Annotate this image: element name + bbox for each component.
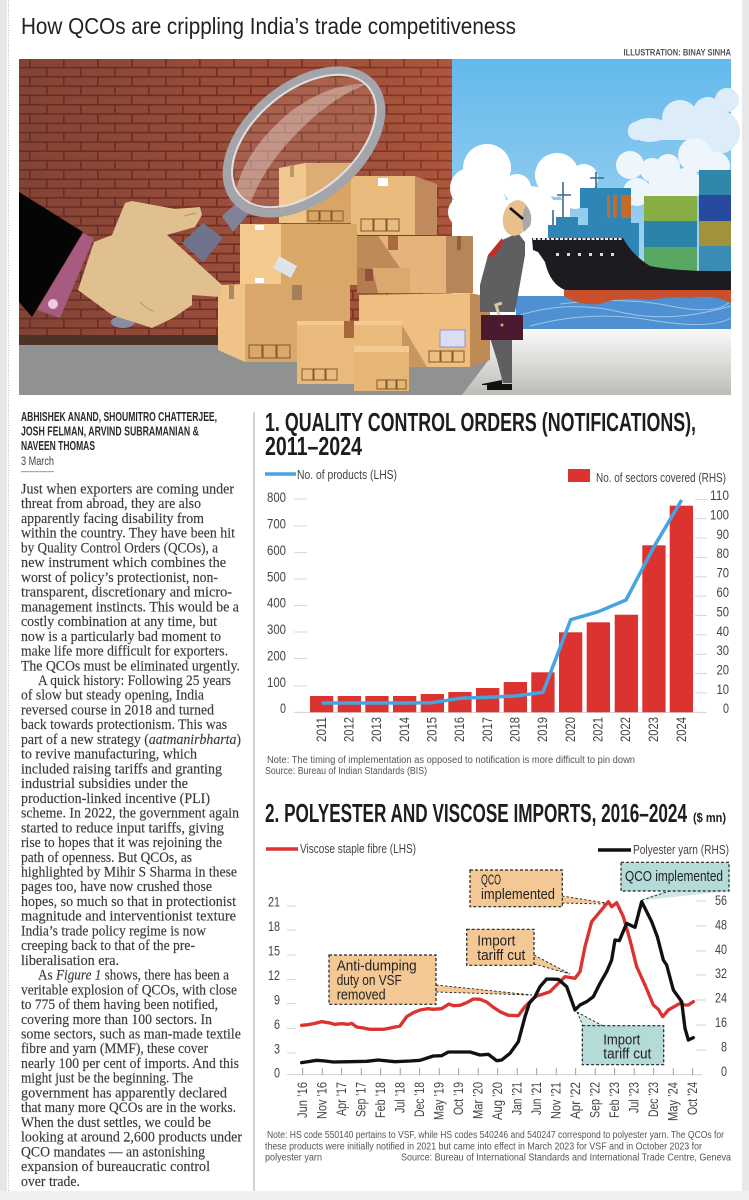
month labels: Nov ’16 (314, 1082, 330, 1119)
article body text: When the dust settles, we could be (21, 1115, 211, 1131)
article body text: hopes, so much so that in protectionist (21, 894, 237, 910)
left page margin strip (0, 0, 7, 1192)
article body text: highlighted by Mihir S Sharma in these (21, 864, 237, 880)
man with briefcase (480, 198, 532, 390)
right page margin strip (742, 0, 749, 1192)
bottom-left big box (218, 284, 350, 362)
article body text: included raising tariffs and granting (21, 761, 222, 777)
left axis labels: 700 (267, 516, 286, 532)
left axis labels: 12 (268, 968, 280, 983)
chart 2 legend: polyester (598, 842, 729, 857)
year labels: 2011 (314, 717, 329, 742)
small front box (297, 321, 402, 384)
article body text (21, 482, 242, 1190)
callout: anti-dumping duty removed: removed (337, 987, 386, 1004)
article body text: As Figure 1 shows, there has been a (38, 968, 229, 984)
month labels: Sep ’17 (352, 1082, 368, 1117)
right axis labels: 16 (715, 1015, 727, 1030)
year labels: 2014 (397, 717, 412, 742)
year labels: 2019 (535, 717, 550, 742)
month labels: Feb ’23 (606, 1082, 622, 1118)
article body text: reversed course in 2018 and turned (21, 702, 214, 718)
red line: viscose staple fibre (302, 902, 693, 1029)
top-left box (279, 163, 351, 223)
right axis labels: 50 (716, 604, 729, 619)
article body text: worst of policy’s protectionist, non- (21, 570, 218, 586)
left axis labels: 100 (267, 675, 286, 690)
callout: import tariff cut (viscose) (467, 929, 570, 974)
black line: polyester yarn (302, 902, 693, 1063)
right axis labels: 56 (715, 893, 727, 908)
article body text: transparent, discretionary and micro- (21, 585, 232, 601)
callout: QCO implemented (polyester) (621, 862, 729, 900)
chart 2 heading: ($ mn) (693, 810, 726, 825)
chart 1: bars and line (267, 488, 729, 742)
left axis labels: 300 (267, 622, 286, 637)
left axis labels: 15 (268, 944, 280, 958)
article body text: make life more difficult for exporters. (21, 644, 228, 660)
callout: anti-dumping duty removed (329, 955, 532, 1004)
month labels: Jan ’21 (508, 1082, 524, 1115)
left axis labels: 18 (268, 919, 280, 934)
date: 3 March (21, 456, 54, 468)
article body text: by Quality Control Orders (QCOs), a (21, 540, 218, 556)
right axis labels: 70 (716, 566, 729, 581)
month labels: Aug ’20 (489, 1082, 505, 1120)
callout: import tariff cut (viscose): Import (477, 932, 516, 949)
handling icons (249, 211, 464, 389)
right axis labels: 24 (715, 991, 727, 1006)
year labels: 2013 (369, 717, 384, 742)
right axis labels: 32 (715, 966, 727, 981)
right axis labels: 10 (716, 682, 729, 697)
chart 1 legend: sectors (568, 469, 726, 485)
year labels: 2021 (590, 717, 606, 742)
floor (19, 345, 490, 395)
chart 2: import lines and callouts (268, 862, 729, 1121)
right axis labels (710, 488, 729, 716)
article body text: rise to hopes that it was rejoining the (21, 835, 222, 851)
right axis labels: 0 (723, 701, 729, 716)
right axis labels: 40 (716, 624, 729, 639)
month labels: Jul ’18 (392, 1082, 408, 1113)
article body text: Just when exporters are coming under (21, 482, 234, 498)
left axis labels: 0 (280, 701, 286, 716)
middle-left box (240, 224, 357, 285)
right axis labels: 40 (715, 942, 727, 957)
left axis labels: 200 (267, 648, 286, 664)
chart 2 note and source: polyester yarn (265, 1152, 322, 1164)
magnifying glass (111, 43, 408, 328)
container ship (532, 170, 731, 304)
month labels: Jun ’21 (528, 1082, 544, 1115)
bottom page margin strip (0, 1191, 749, 1200)
left axis labels: 21 (268, 894, 280, 910)
article body text: covering more than 100 sectors. In (21, 1012, 212, 1028)
article body text: threat from abroad, they are also (21, 496, 201, 512)
article body text: expansion of bureaucratic control (21, 1159, 210, 1175)
bottom-right big box (359, 293, 490, 367)
brick wall (19, 59, 452, 345)
article body text: veritable explosion of QCOs, with close (21, 982, 237, 998)
byline: ABHISHEK ANAND, SHOUMITRO CHATTERJEE, (21, 410, 217, 424)
callout: import tariff cut (polyester): tariff cut (603, 1046, 652, 1063)
month labels (294, 1082, 700, 1121)
right axis labels: 8 (721, 1039, 727, 1054)
top-right box (351, 176, 437, 235)
article body text: of slow but steady opening, India (21, 688, 204, 704)
right axis labels: 48 (715, 917, 727, 932)
article body text: fibre and yarn (MMF), these cover (21, 1041, 208, 1057)
month labels: Dec ’23 (645, 1082, 661, 1117)
year labels: 2020 (563, 717, 578, 742)
blue line: products (322, 500, 682, 703)
article body text: magnitude and interventionist texture (21, 909, 236, 925)
year labels: 2015 (424, 717, 440, 742)
right axis labels: 110 (710, 488, 729, 503)
left axis labels: 9 (274, 992, 280, 1007)
title: How QCOs are crippling India’s trade competitiveness (21, 13, 516, 39)
month labels: Oct ’24 (684, 1082, 700, 1115)
callout: import tariff cut (viscose): tariff cut (477, 947, 526, 964)
year labels: 2023 (646, 717, 661, 742)
left axis labels: 3 (274, 1041, 280, 1056)
month labels: Sep ’22 (586, 1082, 602, 1118)
article body text: India’s trade policy regime is now (21, 923, 206, 939)
year labels: 2024 (674, 717, 689, 742)
year labels: 2012 (342, 717, 356, 742)
right axis labels: 30 (716, 643, 729, 658)
left axis labels (267, 490, 286, 716)
left axis labels: 6 (274, 1017, 280, 1032)
chart 1 heading (265, 407, 696, 461)
chart 1 heading: 2011–2024 (265, 431, 362, 461)
article body text: costly combination at any time, but (21, 614, 218, 630)
article body text: within the country. They have been hit (21, 526, 236, 542)
callout: QCO implemented (polyester): QCO implemented (625, 868, 723, 885)
axis ticks (294, 499, 707, 712)
chart 1 note and source: Source: Bureau of Indian Standards (BIS) (265, 766, 427, 777)
pavement (452, 329, 731, 395)
article body text: apparently facing disability from (21, 511, 204, 527)
chart 1 legend: products (265, 467, 397, 482)
chart 1 note and source (265, 755, 635, 777)
byline: JOSH FELMAN, ARVIND SUBRAMANIAN & (21, 424, 199, 438)
month labels: Jun ’16 (294, 1082, 310, 1118)
axes and ticks (287, 901, 706, 1075)
article body text: scheme. In 2022, the government again (21, 806, 239, 822)
right axis labels: 20 (716, 663, 729, 678)
sea (516, 296, 731, 329)
chart 2 legend: viscose: Viscose staple fibre (LHS) (300, 841, 416, 856)
month labels: Apr ’22 (567, 1082, 583, 1119)
article body text: management instincts. This would be a (21, 599, 239, 615)
article body text: back towards protectionism. This was (21, 717, 227, 733)
article body text: QCO mandates — an astonishing (21, 1144, 205, 1160)
byline (21, 410, 217, 453)
article body text: government has apparently declared (21, 1085, 227, 1101)
year labels: 2016 (452, 717, 467, 742)
small recessed box (357, 268, 410, 293)
right axis labels (715, 893, 727, 1079)
article body text: started to reduce input tariffs, giving (21, 820, 224, 836)
callout: import tariff cut (polyester): Import (603, 1031, 641, 1048)
right axis labels: 90 (716, 527, 729, 542)
month labels: May ’24 (664, 1082, 680, 1121)
article body text: path of openness. But QCOs, as (21, 850, 192, 866)
article body text: over trade. (21, 1174, 80, 1190)
year labels: 2022 (618, 717, 633, 742)
left axis labels: 500 (267, 569, 286, 584)
right-middle box (357, 236, 473, 293)
year labels: 2018 (508, 717, 522, 742)
month labels: Oct ’19 (450, 1082, 466, 1115)
article body text: now is a particularly bad moment to (21, 629, 221, 645)
month labels: Dec ’18 (411, 1082, 427, 1117)
callout: anti-dumping duty removed: Anti-dumping (337, 957, 417, 974)
left axis labels (268, 894, 280, 1080)
article body text: liberalisation era. (21, 953, 119, 969)
callout: QCO implemented (viscose) (470, 870, 606, 907)
hand holding the magnifier (19, 192, 222, 328)
red bars: sectors covered (310, 506, 693, 712)
article body text: creeping back to that of the pre- (21, 938, 195, 954)
month labels: Feb ’18 (372, 1082, 388, 1118)
article body text: production-linked incentive (PLI) (21, 791, 210, 807)
month labels: Mar ’20 (470, 1082, 486, 1119)
left axis labels: 800 (267, 490, 286, 505)
left axis labels: 600 (267, 543, 286, 558)
left axis labels: 400 (267, 596, 286, 611)
sky and clouds (448, 59, 740, 329)
chart 1 legend: products: No. of products (LHS) (297, 467, 397, 482)
chart 2 note and source (265, 1130, 731, 1164)
left axis labels: 0 (274, 1066, 280, 1080)
year labels (314, 717, 689, 742)
article body text: industrial subsidies under the (21, 776, 188, 792)
article body text: some sectors, such as man-made textile (21, 1026, 241, 1042)
article body text: to 775 of them having been notified, (21, 997, 218, 1013)
article body text: might just be the beginning. The (21, 1071, 193, 1087)
article body text: new instrument which combines the (21, 555, 226, 571)
article body text: part of a new strategy (aatmanirbharta) (21, 732, 241, 748)
month labels: Nov ’21 (548, 1082, 564, 1119)
chart 2 note and source: these products were initially notified in 2021 but came into effect in March 2023 for VSF and in October 2023 for (265, 1142, 703, 1152)
article body text: that many more QCOs are in the works. (21, 1100, 236, 1116)
month labels: Jul ’23 (626, 1082, 642, 1113)
callout: import tariff cut (polyester) (577, 1012, 664, 1065)
byline: NAVEEN THOMAS (21, 439, 95, 453)
right axis labels: 100 (710, 507, 729, 522)
right axis labels: 0 (721, 1064, 727, 1079)
right axis labels: 60 (716, 585, 729, 600)
article body text: The QCOs must be eliminated urgently. (21, 658, 240, 674)
month labels: May ’19 (430, 1082, 446, 1120)
month labels: Apr ’17 (333, 1082, 349, 1116)
article body text: pages too, have now crushed those (21, 879, 212, 895)
article body text: nearly 100 per cent of imports. And this (21, 1056, 239, 1072)
article body text: to revive manufacturing, which (21, 747, 197, 763)
callout: QCO implemented (viscose): QCO (481, 872, 501, 888)
article body text: looking at around 2,600 products under (21, 1130, 242, 1146)
callout: QCO implemented (viscose): implemented (481, 886, 555, 903)
illustration: inspection of export boxes (19, 43, 740, 395)
smallest front box (354, 346, 409, 391)
chart 1 note and source: Note: The timing of implementation as opposed to notification is more difficult to pin down (267, 755, 635, 766)
year labels: 2017 (480, 717, 495, 742)
callout: anti-dumping duty removed: duty on VSF (337, 972, 402, 989)
article body text: A quick history: Following 25 years (38, 673, 231, 689)
stack of cardboard boxes (218, 163, 490, 391)
right axis labels: 80 (716, 546, 729, 561)
